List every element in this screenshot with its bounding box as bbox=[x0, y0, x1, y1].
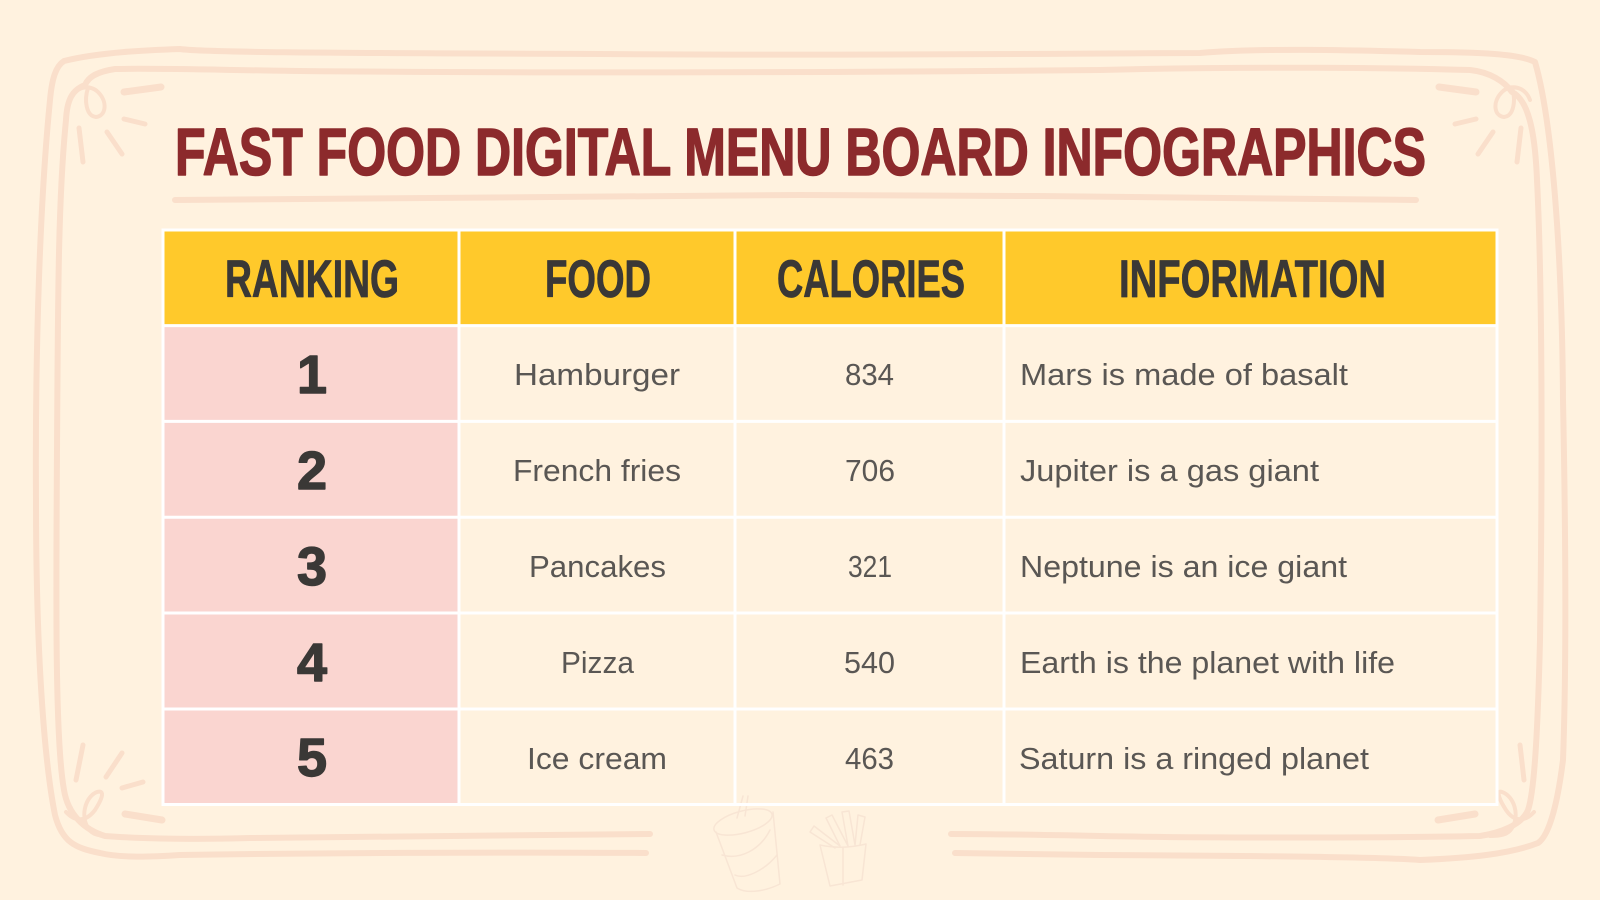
title underline bbox=[175, 195, 1416, 200]
header: food: FOOD bbox=[545, 250, 651, 309]
row 2: Jupiter is a gas giant bbox=[1020, 453, 1319, 488]
row 4: 4 bbox=[297, 633, 327, 693]
icon: fries bbox=[810, 811, 866, 886]
row 1: 1 bbox=[297, 345, 327, 405]
corner loop: bottom right bbox=[1490, 792, 1534, 836]
row 3: 3 bbox=[297, 537, 327, 597]
table grid lines bbox=[163, 230, 1497, 804]
row 2: 2 bbox=[297, 441, 327, 501]
row 2: French fries bbox=[513, 453, 681, 488]
corner loop: bottom left bbox=[66, 792, 110, 836]
row 5: 5 bbox=[297, 728, 327, 788]
icon: drink cup bbox=[711, 796, 780, 891]
row 4 bbox=[297, 633, 1395, 693]
row 3: Pancakes bbox=[529, 549, 666, 584]
corner loop: top left bbox=[70, 87, 105, 117]
header cells bbox=[163, 230, 1497, 326]
ticks: bottom left bbox=[125, 814, 162, 820]
header: ranking: RANKING bbox=[225, 250, 399, 309]
row 2 bbox=[297, 441, 1319, 501]
header: calories: CALORIES bbox=[777, 250, 965, 309]
row 5: Ice cream bbox=[527, 741, 667, 776]
row 1: Hamburger bbox=[514, 357, 680, 392]
row 4: Pizza bbox=[561, 645, 635, 680]
ranking column cells bbox=[163, 326, 459, 804]
row 3: Neptune is an ice giant bbox=[1020, 549, 1347, 584]
ticks: bottom right bbox=[1438, 814, 1475, 820]
row 1: 834 bbox=[845, 357, 894, 392]
row 3 bbox=[297, 537, 1347, 597]
row 4: 540 bbox=[844, 645, 895, 680]
header: information: INFORMATION bbox=[1119, 250, 1386, 309]
frame: inner top and sides bbox=[56, 68, 1542, 839]
row 5: 463 bbox=[845, 741, 894, 776]
row 5 bbox=[297, 728, 1369, 788]
corner loop: top right bbox=[1495, 87, 1530, 117]
ticks: top left bbox=[124, 87, 161, 92]
ticks: top right bbox=[1439, 87, 1476, 92]
table bbox=[163, 230, 1497, 804]
row 2: 706 bbox=[845, 453, 895, 488]
row 1 bbox=[297, 345, 1348, 405]
row 1: Mars is made of basalt bbox=[1020, 357, 1348, 392]
row 3: 321 bbox=[848, 549, 892, 584]
row 4: Earth is the planet with life bbox=[1020, 645, 1395, 680]
row 5: Saturn is a ringed planet bbox=[1019, 741, 1369, 776]
